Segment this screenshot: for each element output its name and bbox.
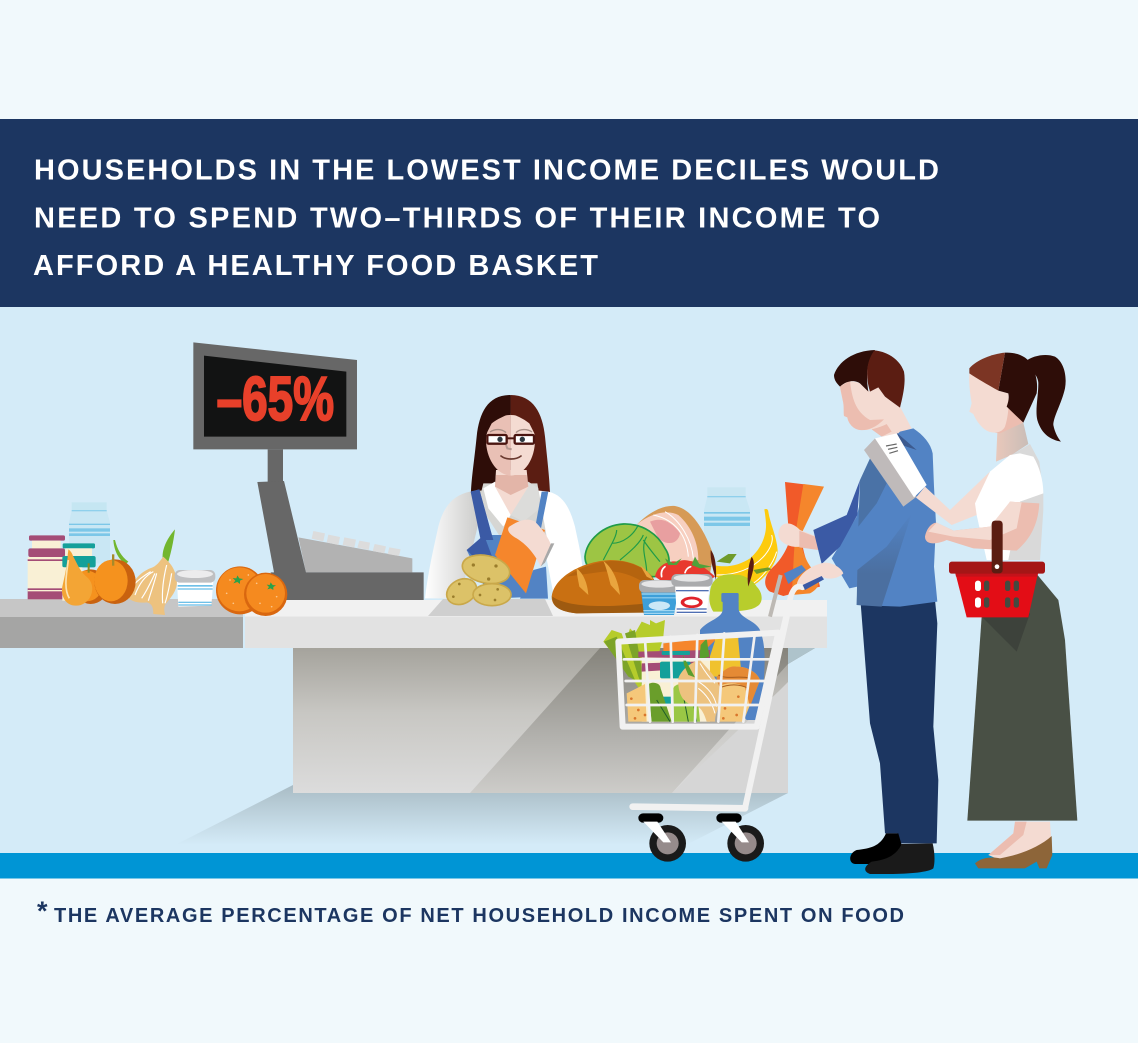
title: NEED TO SPEND TWO–THIRDS OF THEIR INCOME TO xyxy=(34,202,880,234)
cart basket frame xyxy=(618,602,790,808)
apron xyxy=(467,489,538,599)
footnote xyxy=(37,896,904,927)
milk bottle xyxy=(69,502,110,563)
onion xyxy=(113,529,177,615)
cart contents xyxy=(603,593,765,722)
shirt back xyxy=(987,444,1043,560)
scene background xyxy=(0,307,1138,853)
hair xyxy=(834,350,875,392)
shirt front xyxy=(975,453,1043,560)
bread xyxy=(552,560,655,613)
title xyxy=(33,154,939,282)
magenta jar xyxy=(28,535,65,599)
woman xyxy=(864,353,1077,868)
checkout counter xyxy=(175,648,815,845)
potatoes xyxy=(442,551,512,610)
title: HOUSEHOLDS IN THE LOWEST INCOME DECILES WOULD xyxy=(34,154,939,186)
hair xyxy=(998,353,1037,423)
yogurt xyxy=(175,570,215,607)
torso xyxy=(425,490,487,598)
teal jar xyxy=(62,543,96,601)
ham xyxy=(637,506,713,573)
yogurt blue xyxy=(639,580,680,615)
face xyxy=(486,415,511,476)
title: AFFORD A HEALTHY FOOD BASKET xyxy=(33,250,598,282)
skirt xyxy=(967,570,1077,868)
neck and head xyxy=(872,407,912,438)
shoes xyxy=(850,833,902,864)
receipt and cuff xyxy=(864,433,927,507)
cart hand xyxy=(797,563,843,586)
green apple xyxy=(709,550,762,612)
heels xyxy=(975,836,1052,868)
legs xyxy=(988,822,1052,860)
footnote: THE AVERAGE PERCENTAGE OF NET HOUSEHOLD INCOME SPENT ON FOOD xyxy=(54,905,904,927)
orange bag xyxy=(765,482,824,596)
back arm xyxy=(925,502,1039,551)
footnote: * xyxy=(37,896,48,926)
cart handle xyxy=(770,565,824,657)
neck xyxy=(996,423,1028,462)
cabbage xyxy=(585,524,669,577)
banana xyxy=(713,509,778,585)
hair xyxy=(471,395,511,495)
red basket xyxy=(949,521,1045,617)
groceries: right side of counter xyxy=(552,482,824,615)
oranges xyxy=(216,566,287,616)
counter top xyxy=(0,599,827,648)
neck xyxy=(495,470,528,515)
clipboard xyxy=(495,517,545,593)
shopping cart xyxy=(603,593,790,862)
bag hand xyxy=(778,523,818,550)
hand xyxy=(508,520,552,567)
trousers xyxy=(850,600,938,874)
groceries: left side of counter xyxy=(28,502,287,616)
display value: –65% xyxy=(217,365,334,434)
glasses xyxy=(487,435,534,444)
pear xyxy=(62,549,92,606)
shirt xyxy=(832,428,937,607)
apples xyxy=(71,554,136,604)
yogurt white xyxy=(671,574,713,614)
cash register with display xyxy=(193,342,424,601)
forward arm xyxy=(916,472,990,525)
floor stripe xyxy=(0,853,1138,878)
man xyxy=(778,350,938,874)
milk bottle xyxy=(704,487,750,567)
tomatoes xyxy=(655,557,715,580)
head xyxy=(995,395,1023,433)
cashier xyxy=(425,395,583,599)
wheels xyxy=(638,813,764,862)
header banner xyxy=(0,119,1138,307)
